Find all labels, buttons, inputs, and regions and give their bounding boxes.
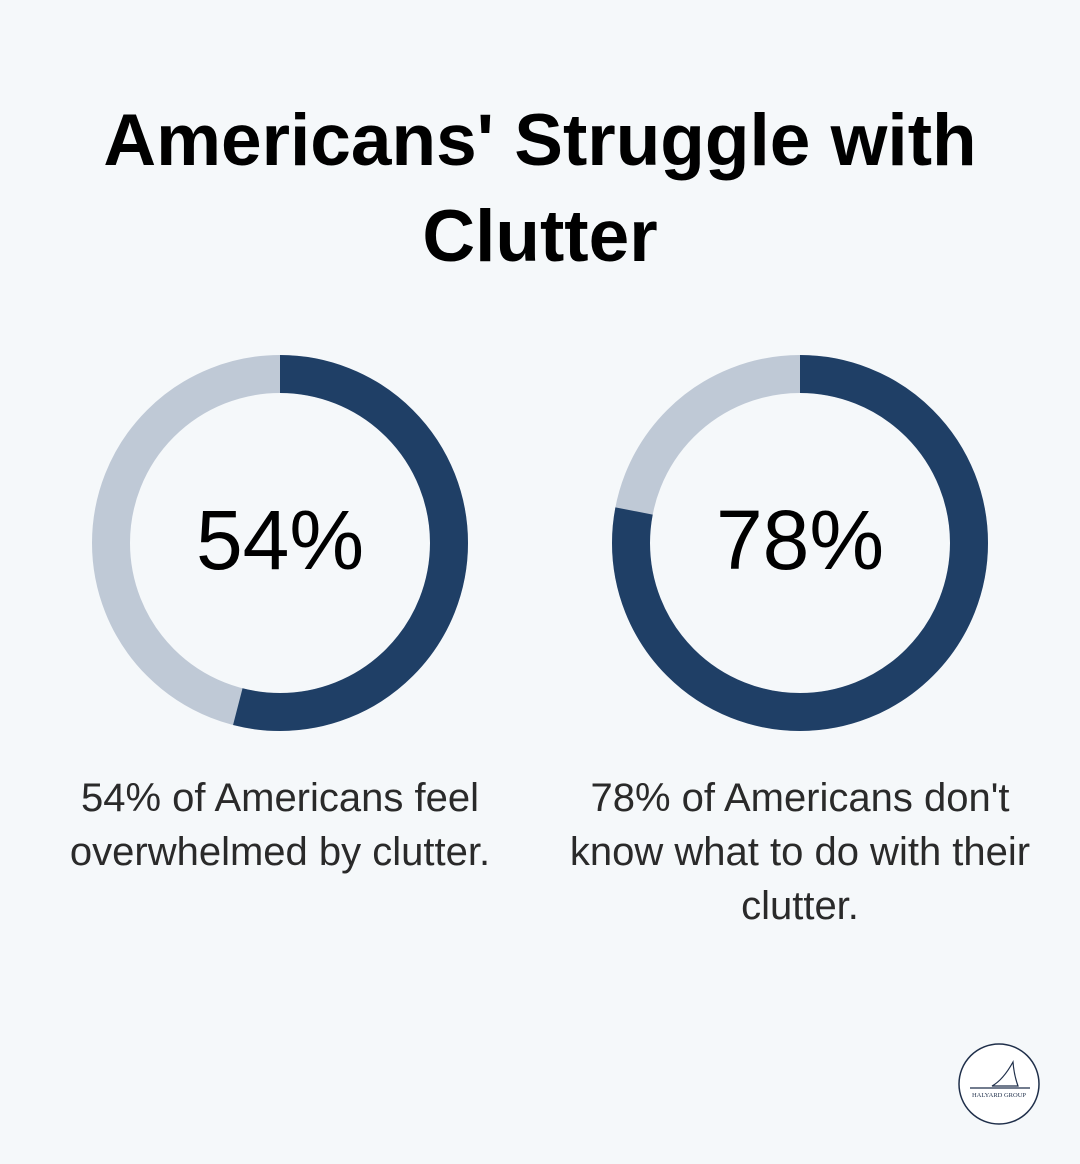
caption: 54%: overwhelmed by clutter. (70, 830, 490, 874)
logo (959, 1044, 1039, 1124)
donut: 54%: 54% (196, 493, 364, 587)
donut: 54% (111, 374, 449, 712)
caption: 78% (570, 776, 1030, 928)
title (103, 100, 977, 277)
caption: 78%: clutter. (741, 884, 859, 928)
title: Americans' Struggle with (103, 100, 977, 181)
caption: 54% (70, 776, 490, 874)
donut: 78%: 78% (716, 493, 884, 587)
caption: 54%: 54% of Americans feel (81, 776, 479, 820)
title: Clutter (422, 196, 658, 277)
logo: HALYARD GROUP (972, 1092, 1026, 1099)
caption: 78%: 78% of Americans don't (590, 776, 1009, 820)
donut: 78% (631, 374, 969, 712)
caption: 78%: know what to do with their (570, 830, 1030, 874)
